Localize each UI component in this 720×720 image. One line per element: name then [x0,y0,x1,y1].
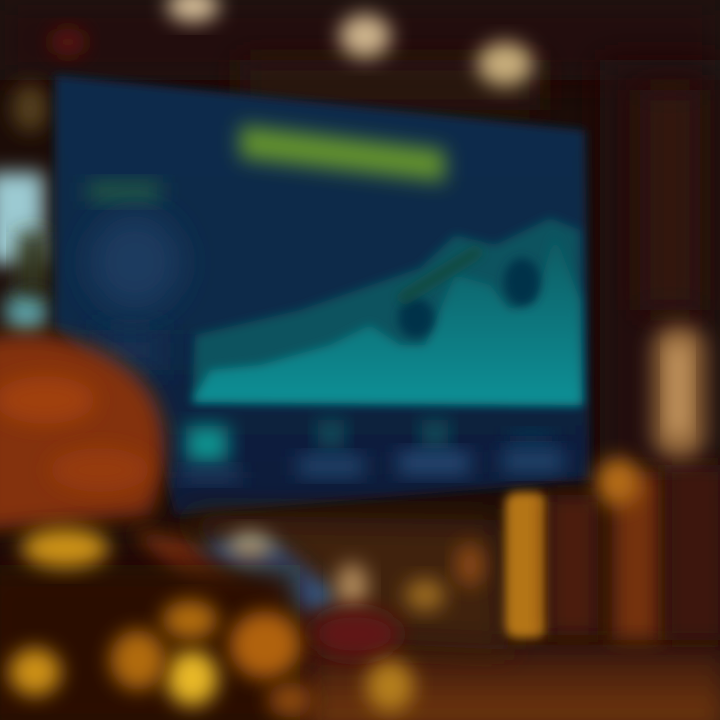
objects: cylinders at bottom right [505,458,720,640]
legend: lower screen labels [180,420,564,482]
table: colourful objects at bottom center [180,515,510,658]
object: orange blob foreground left [0,334,300,640]
object: glowing peach lamp on the right [652,325,706,459]
text block: small green label [88,182,160,202]
ceiling lights [12,0,533,132]
icon: dark dips in the chart line [398,250,540,338]
heading: green screen title [240,125,445,182]
foreground lights: glowing yellow bokeh [0,528,414,720]
chart: round gauge on left of screen [89,214,181,370]
chart: teal area chart [192,218,582,405]
panel: chart screen [55,75,590,515]
window glimpse on the left [0,172,48,334]
